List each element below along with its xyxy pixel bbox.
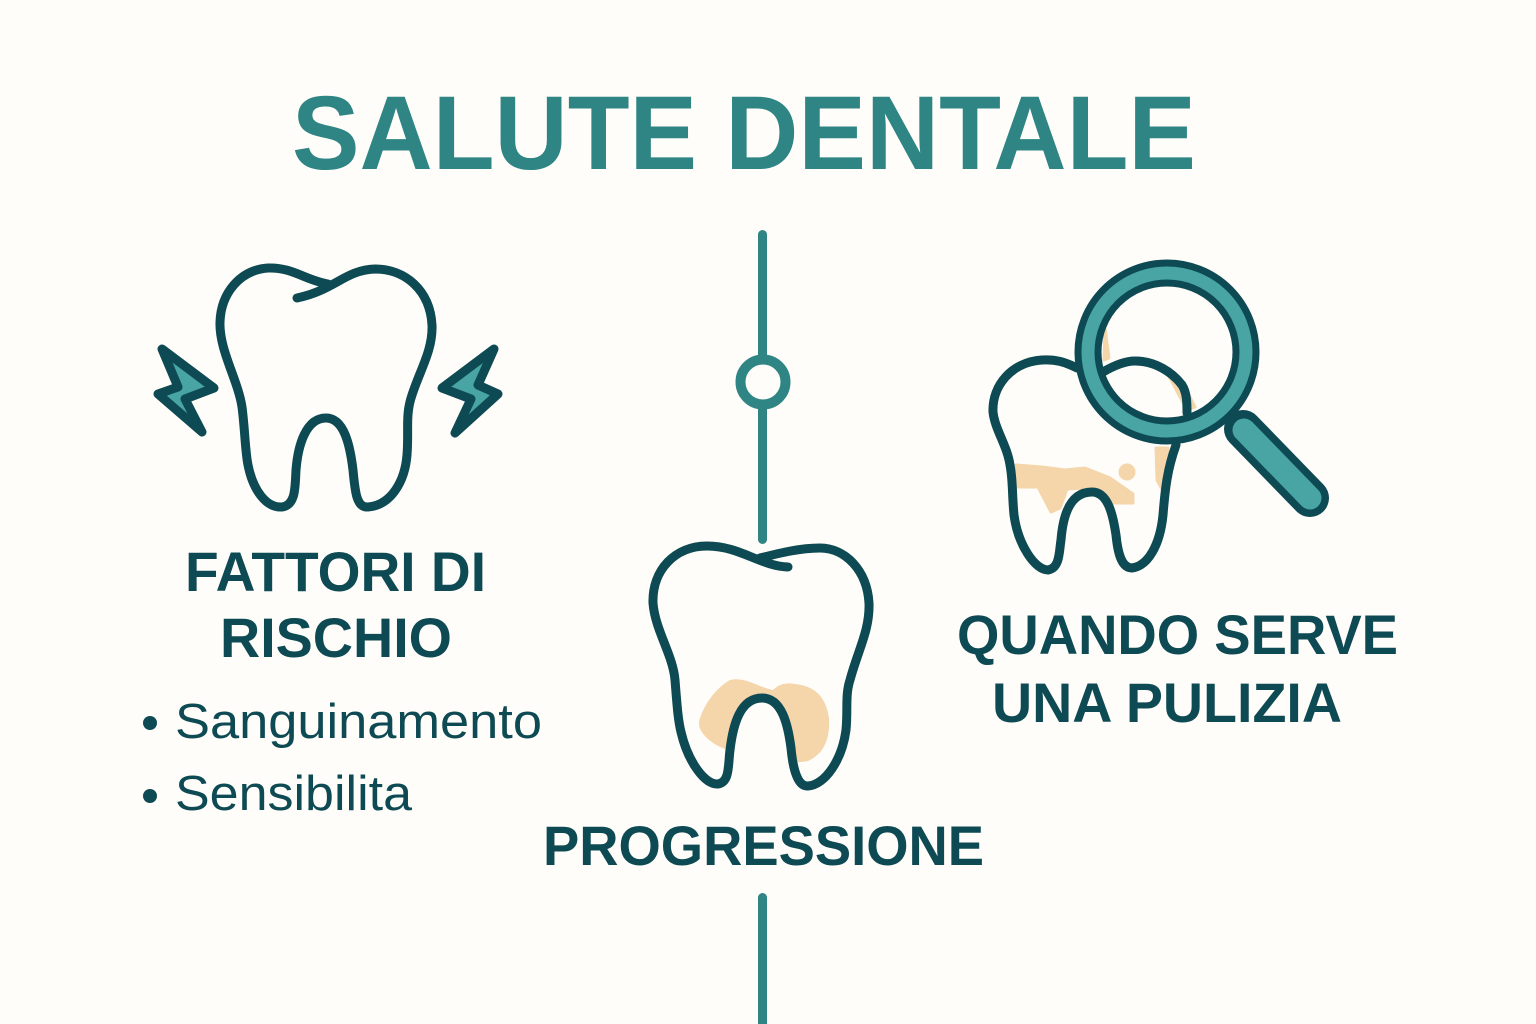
heading: quando serve una pulizia: UNA PULIZIA [992,671,1342,734]
title: SALUTE DENTALE [292,75,1196,192]
stains [1016,328,1195,512]
icon: tooth under magnifier [993,273,1310,570]
icon: tooth with stain [653,546,869,790]
root gap [720,698,800,790]
panel: fattori di rischio [143,268,542,821]
stain [699,679,829,762]
bullet list [143,695,542,821]
tooth outline [653,546,869,786]
icon: left lightning bolt [158,349,214,432]
bullet list: Sensibilita [175,767,413,821]
tooth seen through lens [1103,361,1187,413]
panel: quando serve una pulizia [957,273,1398,734]
timeline: top line with node [740,230,786,544]
heading: fattori di rischio: FATTORI DI [185,540,486,603]
panel: progressione [543,546,984,877]
timeline: bottom line [758,893,767,1024]
tooth outline [993,360,1176,570]
icon: sensitive tooth [158,268,498,507]
tooth outline [220,268,432,507]
heading: fattori di rischio [185,540,486,669]
icon: magnifier ring [1088,273,1246,431]
heading: progressione: PROGRESSIONE [543,814,984,877]
icon: right lightning bolt [442,349,498,433]
heading: quando serve una pulizia [957,603,1398,734]
icon: magnifier handle [1243,429,1310,498]
heading: fattori di rischio: RISCHIO [220,606,452,669]
heading: quando serve una pulizia: QUANDO SERVE [957,603,1398,666]
bullet list: Sanguinamento [175,695,542,749]
